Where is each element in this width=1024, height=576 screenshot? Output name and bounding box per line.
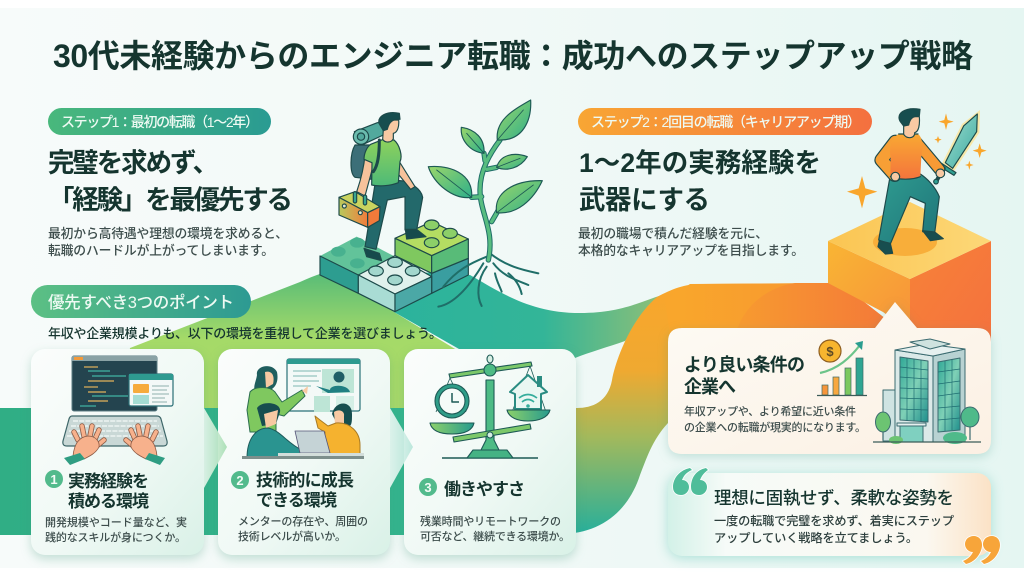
card 1 title: 積める環境 xyxy=(68,492,149,511)
number badge 2: 2 xyxy=(236,473,244,488)
number badge 1 xyxy=(45,470,63,488)
head xyxy=(904,117,919,138)
step 1 body: 最初から高待遇や理想の環境を求めると、 xyxy=(48,226,288,241)
panel: card 3 xyxy=(404,349,576,555)
step 2 heading: 武器にする xyxy=(579,185,710,215)
step 2 body: 最初の職場で積んだ経験を元に、 xyxy=(578,226,768,241)
block: teal back xyxy=(320,237,395,293)
step 1 pill: ステップ1：最初の転職（1〜2年） xyxy=(61,114,259,130)
illustration: hero with sword xyxy=(847,109,987,254)
sparkles xyxy=(847,113,987,208)
arrow: card 1 to card 2 xyxy=(204,408,227,488)
sweater xyxy=(881,134,939,179)
sword xyxy=(934,110,980,184)
step 2 pill: ステップ2：2回目の転職（キャリアアップ期） xyxy=(591,114,861,130)
icon: salary growth chart: $ xyxy=(826,344,834,359)
quote body: 一度の転職で完璧を求めず、着実にステップ xyxy=(714,513,954,528)
icon: opening quote mark xyxy=(673,468,708,495)
roots xyxy=(438,253,538,307)
block: green upper xyxy=(395,220,468,273)
number badge 3 xyxy=(419,478,437,496)
step 1 heading: 「経験」を最優先する xyxy=(48,185,293,215)
number badge 1: 1 xyxy=(50,472,58,487)
cube pedestal xyxy=(828,202,991,360)
step 1 heading: 完璧を求めず、 xyxy=(48,148,219,178)
callout heading: より良い条件の xyxy=(684,355,805,375)
section pill: three points xyxy=(31,285,251,318)
card 1 title: 実務経験を xyxy=(68,472,149,491)
panel: card 1 xyxy=(31,349,204,555)
card 2 title: 技術的に成長 xyxy=(256,470,354,490)
card 2 title: できる環境 xyxy=(256,491,337,510)
icon: code windows and keyboard xyxy=(63,356,173,465)
step 1 body: 転職のハードルが上がってしまいます。 xyxy=(48,243,274,258)
step 2 block xyxy=(578,108,872,258)
card 3 title: 働きやすさ xyxy=(444,480,525,499)
step 2 heading: 1〜2年の実務経験を xyxy=(579,148,821,178)
card 2 body: メンターの存在や、周囲の xyxy=(238,514,368,528)
block: pale front xyxy=(358,256,432,312)
flowing ribbon path xyxy=(0,268,900,535)
quote heading: 理想に固執せず、柔軟な姿勢を xyxy=(714,488,954,508)
callout heading: 企業へ xyxy=(684,377,736,397)
title: 30代未経験からのエンジニア転職：成功へのステップアップ戦略 xyxy=(53,38,973,74)
icon: balance scale xyxy=(430,355,550,458)
toolbox xyxy=(339,192,380,227)
callout body: 年収アップや、より希望に近い条件 xyxy=(684,404,856,418)
step 1 pill xyxy=(48,108,271,135)
block: lower right xyxy=(432,258,468,293)
section pill: three points: 優先すべき3つのポイント xyxy=(48,293,234,312)
card 2 body: 技術レベルが高いか。 xyxy=(238,529,346,543)
quote body: アップしていく戦略を立てましょう。 xyxy=(714,531,918,545)
hiker xyxy=(351,113,426,261)
icon: office building xyxy=(873,339,981,444)
card 3 body: 残業時間やリモートワークの xyxy=(420,514,561,528)
step 2 body: 本格的なキャリアアップを目指します。 xyxy=(578,243,804,258)
section lead text: 年収や企業規模よりも、以下の環境を重視して企業を選びましょう。 xyxy=(48,326,442,341)
card 3 body: 可否など、継続できる環境か。 xyxy=(420,529,570,543)
card 1 body: 践的なスキルが身につくか。 xyxy=(45,530,186,544)
icon: mentoring team xyxy=(242,359,364,459)
number badge 3: 3 xyxy=(424,480,432,495)
panel: better company callout xyxy=(668,302,991,454)
number badge 2 xyxy=(231,471,249,489)
stem xyxy=(472,140,500,260)
illustration: lego blocks and hiker xyxy=(320,113,468,312)
step 2 pill xyxy=(578,108,872,135)
callout body: の企業への転職が現実的になります。 xyxy=(684,420,866,434)
card 1 body: 開発規模やコード量など、実 xyxy=(45,515,187,529)
step 1 block xyxy=(48,108,293,258)
panel: closing quote xyxy=(668,468,1000,564)
icon: closing quote mark xyxy=(963,536,1000,564)
icon: salary growth chart xyxy=(817,340,867,396)
panel: card 2 xyxy=(218,349,390,555)
arrow: card 2 to card 3 xyxy=(390,408,413,488)
legs xyxy=(879,174,939,244)
illustration: sprout with roots xyxy=(428,100,542,307)
leaves xyxy=(428,100,542,213)
